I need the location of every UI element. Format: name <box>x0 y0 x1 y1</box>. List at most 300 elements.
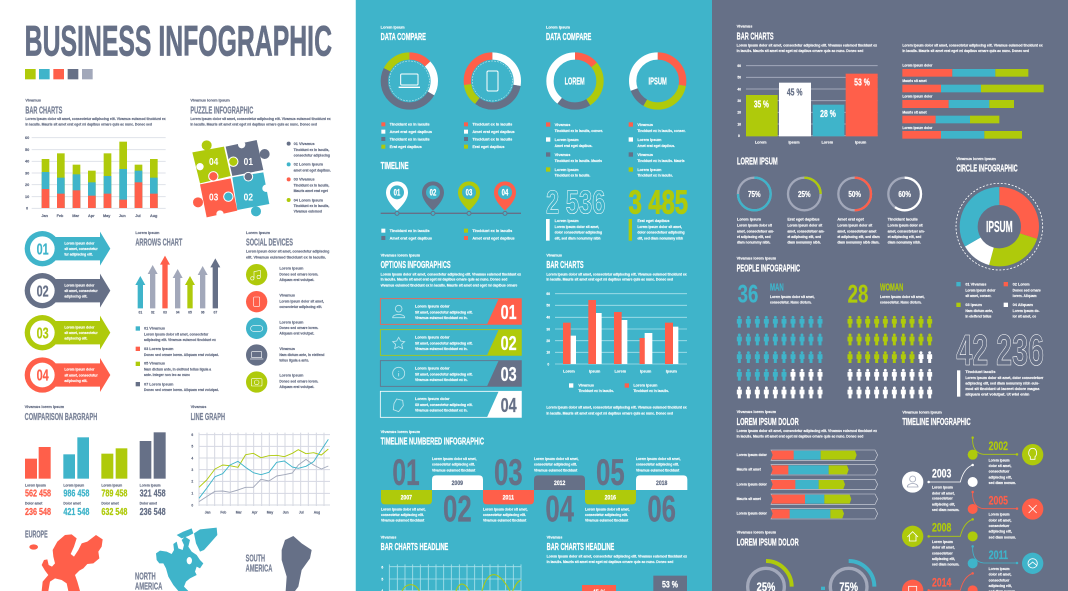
heading: arrows chart: Lorem Ipsum <box>135 231 160 235</box>
timeline captions: Vivamus euismod tincidunt <box>636 468 680 472</box>
arrows chart legend: 01 Vivamus <box>144 327 165 331</box>
timeline captions: sed diam nonum. <box>989 481 1016 485</box>
heading: bar charts headline right: Vivamus <box>547 536 562 540</box>
line graph: Feb <box>220 511 226 515</box>
timeline step 2014: 2014 <box>932 575 952 589</box>
arrow 04: Lorem ipsum dolor <box>64 368 95 372</box>
social devices list: Lorem Ipsum <box>279 374 304 378</box>
option 03: Sit amet, consectetur adipiscing elit. <box>415 372 473 376</box>
heading: bar charts: Vivamus <box>25 98 41 102</box>
arrows chart legend: 05 Vivamus <box>144 362 165 366</box>
heading: arrows chart: ARROWS CHART <box>135 238 182 249</box>
donut legends right: Tincidunt ex in iaculis, conser. <box>637 129 686 133</box>
heading: lorem ipsum rings: LOREM IPSUM <box>737 156 778 167</box>
timeline captions: dolor sit amet, <box>989 518 1011 522</box>
donut legends right: Tincidunt ex in iaculis. <box>555 174 590 178</box>
bar chart: stacked months: Feb <box>57 214 64 218</box>
timeline numbered tabs: 2016 <box>605 495 616 502</box>
number: 42 236: adipiscing elit, sed diam nonummy nibh euis- <box>965 381 1039 385</box>
option 04: Sit amet, consectetur adipiscing elit. <box>415 403 473 407</box>
timeline step 2002: 2002 <box>989 439 1008 453</box>
heading: data compare left <box>381 26 426 43</box>
bar chart teal: 30 <box>546 327 550 331</box>
bar chart teal: Ipsum <box>666 369 678 373</box>
option 03: 03 <box>501 363 517 386</box>
arrows chart: 06 <box>201 311 205 315</box>
arrow 04 <box>25 357 110 393</box>
bar chart slate: Ipsum <box>788 141 800 145</box>
heading: bar charts slate: Vivamus <box>737 25 752 29</box>
arrow 02: sit amet, consectetur <box>64 289 98 293</box>
heading: options infographics: in iaculis. Mauris sit amet erat eget mi dapibus ornare quis ac nunc. Donec sed <box>381 278 507 282</box>
bar chart: stacked months: 50 <box>25 148 29 152</box>
bar chart legend: Lorem ipsum dolor sit amet, consectetur adipiscing elit. Vivamus euismod tincidunt ex <box>546 406 687 410</box>
line graph: Apr <box>252 511 258 515</box>
heading: lorem ipsum dolor: in iaculis. Mauris sit amet erat eget mi dapibus ornare quis ac nunc. Donec sed <box>737 435 863 439</box>
circle legend: Lorem ipsum do- <box>1013 309 1040 313</box>
heading: bar charts slate: Lorem ipsum dolor sit amet, consectetur adipiscing elit. Vivamus euismod tincidunt ex <box>737 43 877 47</box>
map: North America <box>135 528 217 591</box>
heading: social devices: SOCIAL DEVICES <box>246 238 293 249</box>
heading: data compare left: DATA COMPARE <box>381 32 426 43</box>
timeline step 2003 <box>902 464 978 493</box>
timeline step 2008 <box>902 518 978 547</box>
man stat <box>738 281 815 309</box>
line graph <box>191 433 330 515</box>
heading: puzzle infographic: Lorem ipsum dolor sit amet, consectetur adipiscing elit. Vivamus euismod tincidunt ex <box>190 117 331 121</box>
option 01: Vivamus euismod tincidunt ex in. <box>415 316 468 320</box>
donut legends left: Amet erat eget dapibus <box>390 130 432 134</box>
comparison figures: 562 458 <box>25 489 51 500</box>
heading: bar charts: Lorem ipsum dolor sit amet, consectetur adipiscing elit. Vivamus euismod tincidunt ex <box>25 117 166 121</box>
circle legend: 04 Aliquam <box>1013 303 1034 307</box>
arrow 04: sit amet, consectetur <box>64 373 98 377</box>
number: 2 536 <box>546 184 605 241</box>
option 02: Vivamus euismod tincidunt ex in. <box>415 347 468 351</box>
circle donut <box>956 183 1043 270</box>
progress arrows: Mauris sit amet <box>737 497 762 501</box>
donut 3 <box>550 56 600 106</box>
arrows chart legend: Donec sed ornare lorem. Aliquam erat volutpat. <box>144 353 219 357</box>
number: 3 485: 3 485 <box>629 184 688 221</box>
timeline legend: Amet erat eget dapibus <box>472 236 515 240</box>
donut legends right: Lorem ipsum <box>637 138 662 142</box>
bar chart slate: 53 % <box>854 78 870 89</box>
bar chart: stacked months: Mar <box>72 214 80 218</box>
number: 3 485 <box>629 184 688 241</box>
donut legends left: Erat eget dapibus <box>390 145 422 149</box>
circle legend: sit amet, conser. <box>965 294 991 298</box>
heading: data compare left: Lorem Ipsum <box>381 26 405 30</box>
heading: comparison bargraph: Vivamus lorem ipsum <box>25 405 65 409</box>
heading: circle infographic: Vivamus lorem ipsum <box>956 157 996 161</box>
heading: bar charts teal: in iaculis. Mauris sit amet erat eget mi dapibus ornare quis ac nunc. Donec sed <box>546 278 673 282</box>
bar chart teal: 60 <box>546 292 550 296</box>
puzzle legend: consectetur adipiscing <box>294 154 330 158</box>
bar chart slate: 0 <box>738 134 740 138</box>
arrow 03: adipiscing elit. <box>64 337 88 341</box>
bar chart teal: Ipsum <box>640 369 652 373</box>
timeline captions: sed diam nonum. <box>932 508 959 512</box>
circle legend: in eleifend tellus <box>965 315 992 319</box>
arrow 03: Lorem ipsum dolor <box>64 325 95 329</box>
donut legends right: Vivamus <box>637 153 653 157</box>
colour swatches <box>25 69 93 79</box>
heading: line graph: LINE GRAPH <box>191 412 225 423</box>
timeline captions: sed diam nonum. <box>932 563 959 567</box>
bar chart legend: Lorem Ipsum <box>633 383 658 387</box>
line graph: Jun <box>283 511 289 515</box>
timeline captions: dolor sit amet, <box>989 573 1011 577</box>
number: 2 536: Lorem ipsum dolor sit amet, <box>555 225 599 229</box>
line graph: May <box>267 511 273 515</box>
social devices list: Aliquam erat volutpat. <box>279 332 314 336</box>
bar chart: stacked months: 0 <box>26 206 28 210</box>
bar chart teal: 0 <box>547 362 549 366</box>
arrow 03: 03 <box>37 325 49 342</box>
map: South America: SOUTH <box>246 554 265 565</box>
heading: social devices: elit. Vivamus euismod tincidunt ex in iaculis. <box>246 255 326 259</box>
bar chart: stacked months: Apr <box>88 214 95 218</box>
bar chart: stacked months: 40 <box>25 160 29 164</box>
puzzle legend: 02 Lorem Ipsum <box>294 163 324 167</box>
bar chart slate: 35 % <box>754 99 769 110</box>
arrow 03 <box>25 315 110 350</box>
comparison figures: Dolor amet <box>101 501 120 505</box>
social devices list: Lorem ipsum dolor sit amet, <box>279 299 324 303</box>
bar chart slate: 30 <box>737 99 741 103</box>
arrow 02: 02 <box>37 283 49 300</box>
arrows chart legend: ante. Integer non leo ac nunc <box>144 373 190 377</box>
timeline captions: Vivamus euismod tincidunt <box>381 519 425 523</box>
timeline captions: consectetuer <box>989 578 1010 582</box>
line chart bottom: 5 <box>381 577 383 581</box>
puzzle: 01 <box>244 157 253 168</box>
bar chart slate: Lorem <box>755 141 767 145</box>
heading: bar charts slate <box>737 25 877 53</box>
heading: social devices: Lorem ipsum dolor sit amet, consectetur adipiscing <box>246 250 329 254</box>
ring gauges: Erat eget dapibus <box>787 217 819 221</box>
comparison figures: 421 548 <box>63 507 90 518</box>
number: 2 536: Lorem ipsum <box>555 219 579 223</box>
panel: slate <box>712 0 1068 591</box>
social devices list: consectetur adipiscing elit. <box>279 305 322 309</box>
timeline numbered tabs: 2011 <box>503 495 514 502</box>
timeline captions: Lorem ipsum dolor sit amet, <box>636 457 681 461</box>
timeline captions: Vivamus euismod tincidunt <box>432 468 476 472</box>
puzzle legend: 03 Vivamus <box>294 178 315 182</box>
number: 3 485: Erat eget dapibus <box>637 219 669 223</box>
timeline captions: dolor sit amet, <box>932 546 955 550</box>
heading: bar charts headline right: in iaculis. Mauris sit amet erat eget mi dapibus ornare quis ac nunc. Donec sed <box>547 560 673 564</box>
heading: social devices: Lorem Ipsum <box>246 231 271 235</box>
bar chart teal: 20 <box>546 339 550 343</box>
arrow 01: Lorem ipsum dolor <box>64 241 95 245</box>
heading: bar charts teal: BAR CHARTS <box>546 260 584 271</box>
arrows chart legend: 07 Lorem Ipsum <box>144 382 174 386</box>
woman stat: consectetur. Nunc dictum. <box>880 300 922 304</box>
heading: bar charts headline left: Vivamus <box>381 536 396 540</box>
ring gauges: 60% <box>898 189 911 199</box>
timeline captions: consectetuer <box>932 497 953 501</box>
timeline captions: Lorem ipsum <box>989 567 1010 571</box>
number: 3 485: dolor consectetuer adipiscing <box>637 231 685 235</box>
heading: arrows chart <box>135 231 182 249</box>
heading: timeline numbered <box>381 430 484 448</box>
timeline pins: 01 <box>394 188 400 198</box>
ring gauges: et adipiscing elit, sed <box>737 235 771 239</box>
option 04: 04 <box>501 394 517 417</box>
donut legends left: Tincidunt ex in iaculis <box>472 123 512 127</box>
timeline numbers <box>392 452 676 530</box>
circle donut: IPSUM <box>986 219 1013 236</box>
circle legend: 03 Ipsum <box>965 303 983 307</box>
timeline captions: consectetur adipiscing elit. <box>381 513 424 517</box>
heading: options infographics: Vivamus lorem ipsum <box>381 253 421 257</box>
number: 42 236: Tincidunt iaculis <box>965 370 995 374</box>
timeline captions: Lorem ipsum <box>932 540 953 544</box>
timeline captions: Vivamus euismod tincidunt <box>483 519 527 523</box>
heading: data compare right: Lorem Ipsum <box>546 26 571 30</box>
timeline legend: Tincidunt ex in iaculis <box>472 229 512 233</box>
donut legends left: Tincidunt ex in iaculis <box>472 137 512 141</box>
bar chart: stacked months: Jul <box>135 214 141 218</box>
bar chart teal: Lorem <box>563 369 575 373</box>
number: 2 536: 2 536 <box>546 184 605 221</box>
progress arrows: Lorem ipsum dolor <box>737 512 768 516</box>
ring gauges: Lorem ipsum dolor sit <box>737 224 773 228</box>
heading: bar charts headline right <box>547 536 687 564</box>
heading: bar charts teal <box>546 253 687 282</box>
timeline pins: 04 <box>502 188 508 198</box>
ring gauges: 50% <box>848 189 861 199</box>
bar chart legend: Vivamus <box>578 383 594 387</box>
option 03: Vivamus euismod tincidunt ex in. <box>415 378 468 382</box>
heading: bar charts: in iaculis. Mauris sit amet erat eget mi dapibus ornare quis ac nunc. Donec sed <box>25 123 152 127</box>
social devices list: Nam dictum ante, in eleifend <box>279 353 324 357</box>
ring gauges: et adipiscing elit, sed diam <box>837 235 880 239</box>
heading: bar charts headline right: BAR CHARTS HEADLINE <box>547 542 615 553</box>
arrows chart legend <box>136 326 219 392</box>
comparison figures: 632 548 <box>101 507 128 518</box>
title: BUSINESS INFOGRAPHIC <box>25 18 332 66</box>
bar chart legend: Tincidunt ex in iaculis. <box>633 389 669 393</box>
puzzle: 03 <box>209 192 219 203</box>
heading: puzzle infographic: PUZZLE INFOGRAPHIC <box>190 105 253 116</box>
progress arrows <box>737 450 878 519</box>
arrow 04: adipiscing elit. <box>64 379 88 383</box>
comparison figures: 321 458 <box>140 489 166 500</box>
arrows chart: 01 <box>138 311 142 315</box>
arrow 02: adipiscing elit. <box>64 295 88 299</box>
ring gauges: amet, consectetuer amet <box>837 229 877 233</box>
arrows chart legend: 03 Lorem Ipsum <box>144 347 174 351</box>
option 01: 01 <box>501 301 517 324</box>
circle legend: Nam dictum ante, <box>965 309 993 313</box>
map: North America: NORTH <box>135 571 156 582</box>
arrows chart legend: Nam dictum ante, in eleifend tellus ligula a <box>144 367 211 371</box>
comparison figures: 236 548 <box>140 507 166 518</box>
heading: circle infographic <box>956 157 1018 175</box>
social devices list: Donec sed ornare lorem. <box>279 379 318 383</box>
donut 4: IPSUM <box>648 77 667 88</box>
heading: puzzle infographic: in iaculis. Mauris sit amet erat eget mi dapibus ornare quis ac nunc. Donec sed <box>190 123 317 127</box>
man stat: consectetur. Nunc dictum. <box>770 300 812 304</box>
ring gauges: et adipiscing elit, sed <box>787 235 821 239</box>
bar chart: stacked months: 20 <box>25 183 29 187</box>
ring gauges: Amet erat eget <box>837 217 865 221</box>
puzzle legend: Tincidunt ex in iaculis, <box>294 204 329 208</box>
donut 4 <box>633 56 683 106</box>
timeline captions: Vivamus euismod tincidunt <box>585 519 629 523</box>
circle legend <box>956 282 1041 319</box>
social devices list: Vivamus <box>279 294 295 298</box>
donut legends right: Vivamus <box>555 153 570 157</box>
timeline captions: consectetur adipiscing elit. <box>432 463 475 467</box>
heading: timeline infographic: TIMELINE INFOGRAPHIC <box>902 417 971 428</box>
stacked horizontal bars: Lorem ipsum dolor <box>902 126 933 130</box>
timeline captions: consectetuer <box>989 524 1010 528</box>
bar chart slate: 20 <box>737 111 741 115</box>
woman stat: WOMAN <box>880 283 903 294</box>
bar chart slate: 45 % <box>787 87 803 98</box>
ring gauges: Lorem ipsum dolor sit <box>787 224 823 228</box>
bar chart slate: Ipsum <box>855 141 867 145</box>
ring gauges: diam nonummy nibh. <box>888 241 921 245</box>
line chart bottom: 6 <box>381 566 383 570</box>
circle legend: Donec sed ornare <box>1013 288 1041 292</box>
man stat: 36 <box>738 281 758 309</box>
heading: bar charts <box>25 98 166 127</box>
heading: puzzle infographic: Vivamus lorem ipsum <box>190 98 230 102</box>
timeline captions: Lorem ipsum dolor sit amet, <box>534 457 579 461</box>
timeline captions: Lorem ipsum dolor sit amet, <box>432 457 477 461</box>
ring gauges: Lorem ipsum dolor sit <box>888 224 924 228</box>
heading: lorem ipsum dolor: Lorem ipsum dolor sit amet, consectetur adipiscing elit. Vivamus euismod tincidunt ex <box>737 429 877 433</box>
bar chart: stacked months: 60 <box>25 136 29 140</box>
heading: lorem ipsum dolor 2 <box>737 531 799 548</box>
heading: data compare right <box>546 26 592 43</box>
timeline numbered tabs: 2007 <box>401 495 412 502</box>
comparison figures: Lorem ipsum <box>101 483 122 487</box>
comparison figures: Dolor amet <box>140 501 158 505</box>
bar chart teal: Lorem <box>614 369 627 373</box>
timeline captions: Lorem ipsum dolor sit amet, <box>381 507 426 511</box>
option 02: Lorem ipsum dolor <box>415 335 450 339</box>
bar chart legend: in iaculis. Mauris sit amet erat eget mi dapibus ornare quis ac nunc. Donec sed <box>546 411 673 415</box>
donut legends right <box>546 122 686 178</box>
donut legends right: Tincidunt ex in iaculis. Mauris <box>637 159 685 163</box>
comparison figures: Lorem ipsum <box>63 483 84 487</box>
comparison figures: Lorem ipsum <box>140 483 161 487</box>
heading: bar charts headline left <box>381 536 449 553</box>
comparison figures: 789 458 <box>101 489 128 500</box>
heading: people infographic <box>737 257 800 274</box>
heading: social devices <box>246 231 329 259</box>
arrows chart: 02 <box>151 311 155 315</box>
timeline numbered tabs: 2009 <box>452 480 463 487</box>
progress arrows: Lorem ipsum dolor <box>737 453 768 457</box>
bar chart teal: Ipsum <box>589 369 601 373</box>
timeline step 2014 <box>902 572 978 591</box>
option 01: Lorem ipsum dolor <box>415 304 450 308</box>
timeline step 2005 <box>968 491 1043 520</box>
circle legend: Lorem ipsum dolor <box>965 288 996 292</box>
timeline captions: Lorem ipsum dolor sit amet, <box>483 507 528 511</box>
donut 1 <box>384 56 434 106</box>
timeline step 2011 <box>968 545 1043 574</box>
arrows chart: 03 <box>163 311 167 315</box>
heading: options infographics: Lorem ipsum dolor sit amet, consectetur adipiscing elit. Vivamus euismod tincidunt ex <box>381 272 521 276</box>
bar chart teal <box>546 292 687 373</box>
heading: comparison bargraph <box>25 405 97 423</box>
puzzle legend: 04 Lorem Ipsum <box>294 198 324 202</box>
map: South America: AMERICA <box>246 564 272 575</box>
map: Europe <box>25 529 103 591</box>
stacked horizontal bars <box>902 43 1044 139</box>
bar chart: stacked months: 30 <box>25 171 29 175</box>
puzzle legend: Tincidunt ex in iaculis, <box>294 148 329 152</box>
heading: lorem ipsum dolor 2: Vivamus lorem ipsum <box>737 531 777 535</box>
arrow labels <box>25 231 329 393</box>
ring gauges: Tincidunt iaculis <box>888 217 918 221</box>
bars: headline bars <box>582 576 687 591</box>
bar chart teal: 50 <box>546 304 550 308</box>
option 02 <box>380 330 521 355</box>
bar chart teal: 40 <box>546 316 550 320</box>
timeline captions: adipiscing elit, <box>989 475 1012 479</box>
comparison figures: 236 548 <box>25 507 51 518</box>
donut 3: LOREM <box>565 77 585 88</box>
partial gauges <box>748 561 874 591</box>
timeline numbered tabs: 2018 <box>656 480 668 487</box>
arrow 02: Lorem ipsum dolor <box>64 283 95 287</box>
circle legend: lorem. Aliquam <box>1013 294 1037 298</box>
man stat: MAN <box>770 283 784 294</box>
heading: options infographics: vivamus euismod tincidunt ex in iaculis. Mauris sit amet erat eget mi dapibus ornare <box>381 283 517 287</box>
number: 2 536: dolor consectetuer adipiscing <box>555 231 602 235</box>
timeline numbers: 05 <box>596 452 625 493</box>
stacked horizontal bars: Lorem ipsum dolor sit amet, consectetur adipiscing elit. Vivamus euismod tincidunt ex <box>902 43 1043 47</box>
donut legends right: Amet erat eget dapibus. <box>555 144 592 148</box>
ring gauges: diam nonummy nibh. <box>787 241 821 245</box>
heading: lorem ipsum dolor: LOREM IPSUM DOLOR <box>737 417 799 428</box>
comparison figures: Dolor amet <box>25 501 43 505</box>
line graph: Aug <box>314 511 320 515</box>
timeline captions: consectetuer <box>932 551 953 555</box>
timeline legend: Tincidunt ex in iaculis <box>390 229 430 233</box>
bar chart: stacked months: May <box>103 214 111 218</box>
timeline legend <box>381 229 515 240</box>
timeline captions: consectetur adipiscing elit. <box>585 513 628 517</box>
puzzle legend: Tincidunt ex in iaculis, <box>294 183 329 187</box>
option 02: Sit amet, consectetur adipiscing elit. <box>415 341 473 345</box>
timeline captions: consectetur adipiscing elit. <box>483 513 526 517</box>
heading: lorem ipsum dolor <box>737 410 877 439</box>
ring gauges: diam nonummy nibh diam. <box>837 241 880 245</box>
timeline captions: dolor sit amet, <box>989 464 1011 468</box>
heading: bar charts: BAR CHARTS <box>25 105 63 116</box>
comparison figures: Dolor amet <box>63 501 82 505</box>
timeline step 2008: 2008 <box>932 521 952 535</box>
timeline step 2005: 2005 <box>989 493 1008 507</box>
bar chart teal: 10 <box>546 351 550 355</box>
social devices list: Aliquam erat volutpat. <box>279 278 314 282</box>
bar chart slate <box>737 64 878 145</box>
timeline step 2002 <box>968 437 1043 465</box>
line graph: Jul <box>299 511 304 515</box>
progress arrows: Lorem ipsum dolor <box>737 482 768 486</box>
